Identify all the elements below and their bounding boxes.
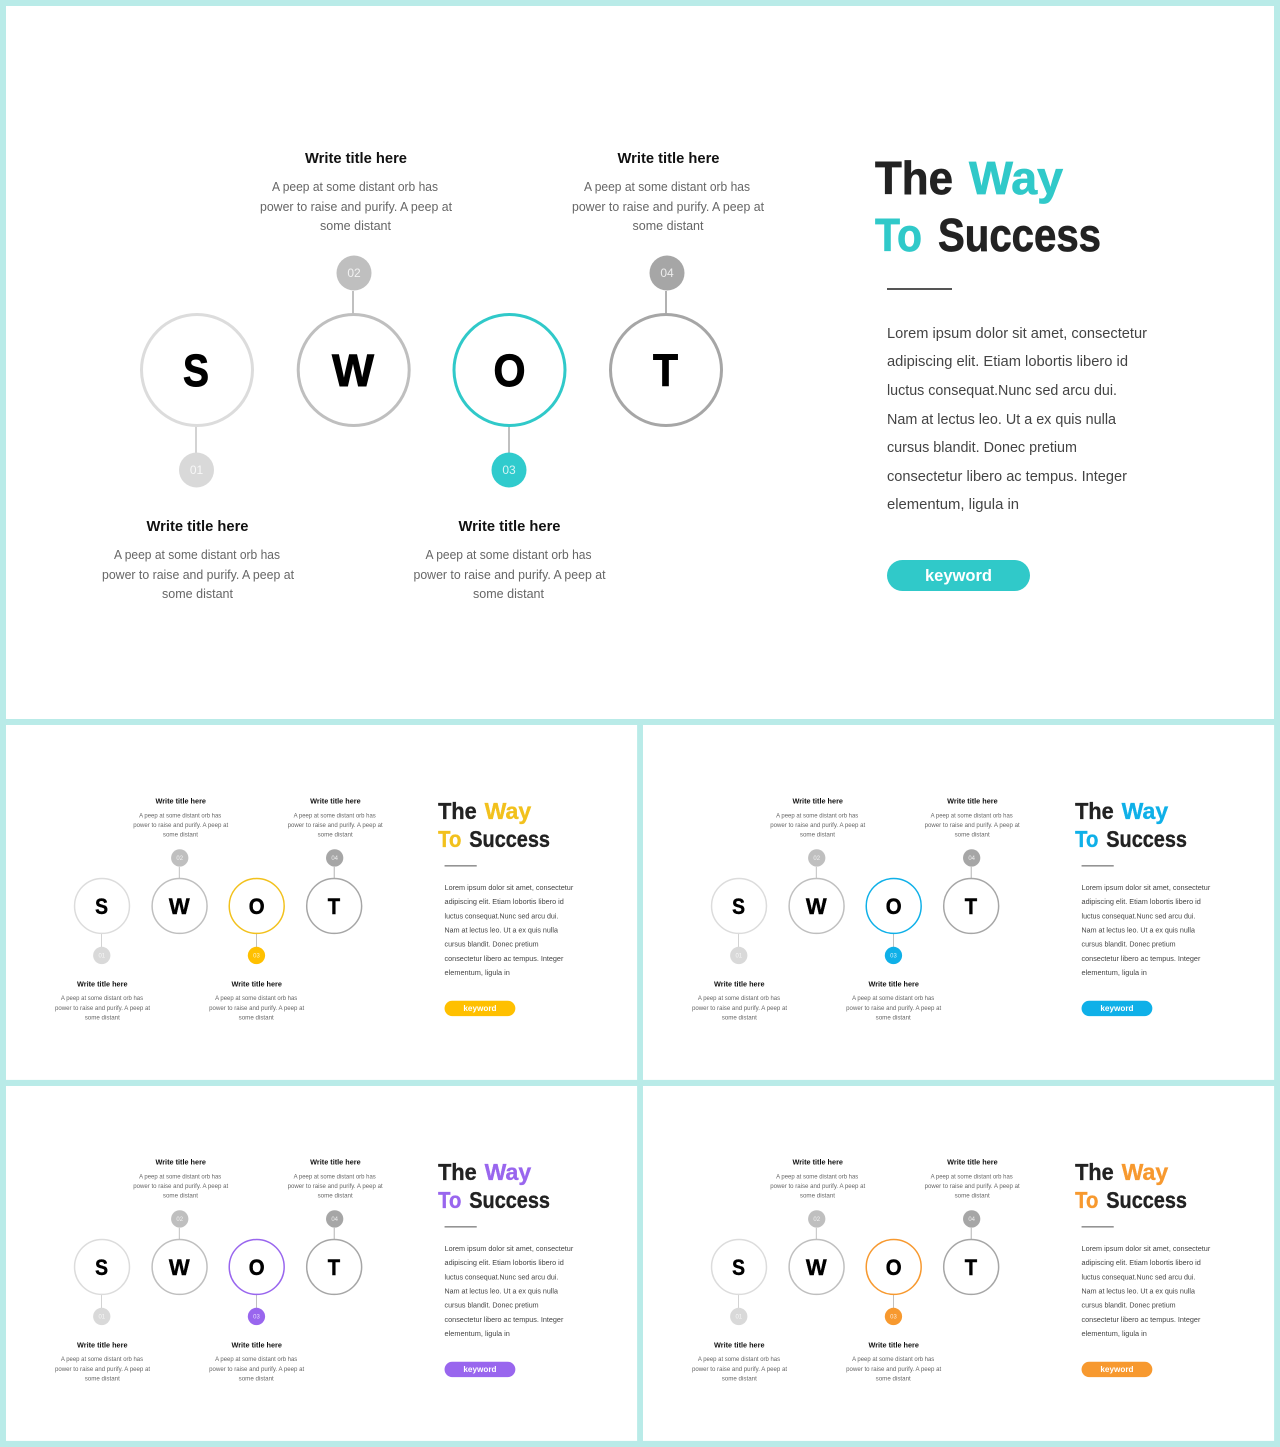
heading: Way — [485, 798, 532, 824]
text block: item 03: some distant — [239, 1015, 274, 1022]
text block: item 04: some distant — [955, 832, 990, 839]
T node with badge 04: T — [965, 1255, 977, 1280]
W node with badge 02: 02 — [176, 1217, 183, 1223]
text block: item 02: Write title here — [305, 150, 407, 167]
S node with badge 01 — [142, 314, 252, 488]
text block: item 04: A peep at some distant orb has — [931, 1173, 1013, 1180]
S node with badge 01: 01 — [735, 953, 743, 959]
text block: item 04 — [288, 1157, 383, 1200]
text block: item 01 — [55, 1340, 150, 1383]
text block: item 04: power to raise and purify. A peep at — [288, 822, 383, 829]
text block: item 04: some distant — [318, 832, 353, 839]
text block: item 03: power to raise and purify. A peep at — [209, 1005, 304, 1012]
T node with badge 04 — [307, 849, 362, 933]
panel: purple slide — [6, 1086, 637, 1441]
text block: item 02: power to raise and purify. A peep at — [133, 822, 228, 829]
body paragraph — [445, 1244, 574, 1338]
T node with badge 04: 04 — [331, 856, 339, 862]
O node with badge 03 — [866, 1239, 921, 1325]
body paragraph: adipiscing elit. Etiam lobortis libero id — [1082, 897, 1201, 906]
text block: item 03: A peep at some distant orb has — [852, 995, 934, 1002]
S node with badge 01 — [712, 1239, 766, 1325]
T node with badge 04: T — [653, 345, 678, 396]
O node with badge 03: 03 — [502, 463, 516, 477]
W node with badge 02: 02 — [813, 1217, 820, 1223]
text block: item 02: A peep at some distant orb has — [776, 1173, 858, 1180]
text block: item 01: Write title here — [714, 979, 765, 988]
body paragraph — [1082, 883, 1211, 977]
body paragraph: cursus blandit. Donec pretium — [1082, 940, 1176, 949]
heading: To — [438, 826, 461, 852]
S node with badge 01: S — [95, 1255, 108, 1280]
text block: item 02: A peep at some distant orb has — [139, 1173, 221, 1180]
body paragraph: luctus consequat.Nunc sed arcu dui. — [1082, 1272, 1195, 1281]
S node with badge 01: S — [183, 345, 209, 396]
text block: item 02: A peep at some distant orb has — [776, 812, 858, 819]
heading: Success — [469, 1187, 550, 1213]
S node with badge 01: 01 — [98, 953, 106, 959]
text block: item 04: Write title here — [310, 1157, 361, 1166]
heading: Way — [485, 1159, 532, 1185]
heading: Success — [469, 826, 550, 852]
body paragraph: luctus consequat.Nunc sed arcu dui. — [445, 911, 558, 920]
panel: large teal slide — [6, 6, 1274, 719]
text block: item 02: Write title here — [155, 1157, 206, 1166]
heading underline — [445, 1226, 477, 1228]
text block: item 04: Write title here — [947, 1157, 998, 1166]
text block: item 03: some distant — [239, 1376, 274, 1383]
body paragraph — [887, 325, 1147, 513]
text block: item 04: some distant — [632, 218, 704, 233]
text block: item 03: power to raise and purify. A peep at — [846, 1366, 941, 1373]
heading: Way — [1122, 1159, 1169, 1185]
text block: item 04 — [925, 796, 1020, 839]
text block: item 02: A peep at some distant orb has — [139, 812, 221, 819]
T node with badge 04: 04 — [968, 856, 976, 862]
text block: item 01: power to raise and purify. A peep at — [55, 1005, 150, 1012]
text block: item 01: Write title here — [146, 518, 248, 535]
S node with badge 01: S — [95, 894, 108, 919]
body paragraph: Lorem ipsum dolor sit amet, consectetur — [445, 1244, 574, 1253]
text block: item 04: Write title here — [947, 796, 998, 805]
heading: To — [438, 1187, 461, 1213]
text block: item 04: some distant — [955, 1193, 990, 1200]
W node with badge 02 — [152, 1210, 207, 1294]
heading — [438, 1159, 550, 1213]
text block: item 03: A peep at some distant orb has — [852, 1356, 934, 1363]
body paragraph: elementum, ligula in — [445, 968, 510, 977]
text block: item 04: power to raise and purify. A peep at — [572, 199, 764, 214]
S node with badge 01: 01 — [190, 463, 203, 477]
heading: To — [875, 209, 922, 261]
body paragraph: elementum, ligula in — [1082, 1329, 1147, 1338]
W node with badge 02 — [152, 849, 207, 933]
T node with badge 04: 04 — [968, 1217, 976, 1223]
text block: item 01: power to raise and purify. A peep at — [692, 1366, 787, 1373]
panel: orange slide — [643, 1086, 1274, 1441]
keyword button: keyword — [1100, 1003, 1134, 1013]
text block: item 01: A peep at some distant orb has — [698, 995, 780, 1002]
S node with badge 01: 01 — [735, 1314, 743, 1320]
text block: item 02: Write title here — [155, 796, 206, 805]
text block: item 03: Write title here — [868, 979, 919, 988]
body paragraph: cursus blandit. Donec pretium — [445, 940, 539, 949]
S node with badge 01: 01 — [98, 1314, 106, 1320]
body paragraph: cursus blandit. Donec pretium — [445, 1301, 539, 1310]
heading: The — [1075, 798, 1114, 824]
body paragraph: consectetur libero ac tempus. Integer — [1082, 1315, 1201, 1324]
text block: item 03: power to raise and purify. A peep at — [846, 1005, 941, 1012]
text block: item 01: some distant — [85, 1376, 120, 1383]
text block: item 02: some distant — [800, 1193, 835, 1200]
body paragraph — [445, 883, 574, 977]
keyword button — [445, 1001, 515, 1016]
keyword button: keyword — [463, 1364, 497, 1374]
S node with badge 01 — [75, 878, 129, 964]
text block: item 03 — [414, 518, 606, 601]
body paragraph: luctus consequat.Nunc sed arcu dui. — [1082, 911, 1195, 920]
T node with badge 04 — [944, 1210, 999, 1294]
body paragraph: luctus consequat.Nunc sed arcu dui. — [887, 382, 1117, 399]
text block: item 03: power to raise and purify. A peep at — [209, 1366, 304, 1373]
heading — [1075, 798, 1187, 852]
W node with badge 02: W — [806, 894, 827, 919]
text block: item 03: Write title here — [231, 1340, 282, 1349]
keyword button — [1082, 1362, 1152, 1377]
text block: item 01 — [102, 518, 294, 601]
body paragraph: adipiscing elit. Etiam lobortis libero id — [887, 353, 1128, 370]
S node with badge 01: S — [732, 1255, 745, 1280]
body paragraph: Nam at lectus leo. Ut a ex quis nulla — [445, 926, 559, 935]
text block: item 04: A peep at some distant orb has — [584, 179, 750, 194]
text block: item 01: Write title here — [77, 979, 128, 988]
heading — [1075, 1159, 1187, 1213]
W node with badge 02 — [298, 256, 409, 426]
text block: item 02: some distant — [163, 1193, 198, 1200]
O node with badge 03 — [229, 1239, 284, 1325]
text block: item 04: power to raise and purify. A peep at — [925, 1183, 1020, 1190]
body paragraph: Lorem ipsum dolor sit amet, consectetur — [1082, 1244, 1211, 1253]
heading: The — [438, 1159, 477, 1185]
O node with badge 03: 03 — [253, 953, 260, 959]
T node with badge 04 — [944, 849, 999, 933]
O node with badge 03: 03 — [890, 1314, 897, 1320]
text block: item 02: power to raise and purify. A peep at — [133, 1183, 228, 1190]
text block: item 01: A peep at some distant orb has — [114, 547, 280, 562]
W node with badge 02: 02 — [176, 856, 183, 862]
O node with badge 03: O — [249, 1255, 265, 1280]
text block: item 04 — [925, 1157, 1020, 1200]
text block: item 02: power to raise and purify. A peep at — [260, 199, 452, 214]
text block: item 03 — [846, 1340, 941, 1383]
O node with badge 03: 03 — [890, 953, 897, 959]
text block: item 01: some distant — [162, 586, 233, 601]
body paragraph: Nam at lectus leo. Ut a ex quis nulla — [1082, 926, 1196, 935]
body paragraph: cursus blandit. Donec pretium — [1082, 1301, 1176, 1310]
text block: item 03: some distant — [876, 1015, 911, 1022]
O node with badge 03: O — [494, 345, 526, 396]
heading underline — [1082, 865, 1114, 867]
body paragraph: Nam at lectus leo. Ut a ex quis nulla — [887, 411, 1117, 428]
body paragraph: Nam at lectus leo. Ut a ex quis nulla — [1082, 1287, 1196, 1296]
text block: item 03: some distant — [473, 586, 544, 601]
S node with badge 01: S — [732, 894, 745, 919]
text block: item 03: Write title here — [458, 518, 560, 535]
T node with badge 04: 04 — [331, 1217, 339, 1223]
text block: item 01: power to raise and purify. A peep at — [102, 567, 294, 582]
heading — [875, 152, 1101, 261]
text block: item 01 — [692, 1340, 787, 1383]
text block: item 01: Write title here — [77, 1340, 128, 1349]
text block: item 03: Write title here — [231, 979, 282, 988]
T node with badge 04: T — [328, 894, 340, 919]
W node with badge 02 — [789, 1210, 844, 1294]
heading: Success — [1106, 826, 1187, 852]
heading underline — [445, 865, 477, 867]
body paragraph: consectetur libero ac tempus. Integer — [887, 468, 1127, 485]
text block: item 03 — [846, 979, 941, 1022]
text block: item 03: power to raise and purify. A peep at — [414, 567, 606, 582]
text block: item 02 — [770, 796, 865, 839]
panel: yellow slide — [6, 725, 637, 1080]
text block: item 02: some distant — [320, 218, 391, 233]
text block: item 04 — [288, 796, 383, 839]
O node with badge 03 — [229, 878, 284, 964]
heading underline — [887, 288, 952, 290]
keyword button: keyword — [463, 1003, 497, 1013]
keyword button — [445, 1362, 515, 1377]
heading: Way — [1122, 798, 1169, 824]
text block: item 03: A peep at some distant orb has — [215, 1356, 297, 1363]
text block: item 04: some distant — [318, 1193, 353, 1200]
text block: item 03 — [209, 979, 304, 1022]
body paragraph: Lorem ipsum dolor sit amet, consectetur — [445, 883, 574, 892]
heading: Success — [938, 209, 1101, 261]
body paragraph: luctus consequat.Nunc sed arcu dui. — [445, 1272, 558, 1281]
body paragraph: elementum, ligula in — [887, 496, 1019, 513]
text block: item 03: A peep at some distant orb has — [215, 995, 297, 1002]
panel: blue slide — [643, 725, 1274, 1080]
O node with badge 03: O — [886, 894, 902, 919]
text block: item 01: Write title here — [714, 1340, 765, 1349]
text block: item 01: some distant — [722, 1376, 757, 1383]
W node with badge 02: W — [806, 1255, 827, 1280]
body paragraph: elementum, ligula in — [1082, 968, 1147, 977]
text block: item 02 — [770, 1157, 865, 1200]
heading: The — [438, 798, 477, 824]
text block: item 01: power to raise and purify. A peep at — [55, 1366, 150, 1373]
text block: item 02 — [133, 796, 228, 839]
text block: item 02 — [133, 1157, 228, 1200]
text block: item 04: power to raise and purify. A peep at — [288, 1183, 383, 1190]
text block: item 01 — [692, 979, 787, 1022]
body paragraph: elementum, ligula in — [445, 1329, 510, 1338]
text block: item 04: Write title here — [310, 796, 361, 805]
body paragraph: adipiscing elit. Etiam lobortis libero id — [445, 897, 564, 906]
W node with badge 02 — [789, 849, 844, 933]
keyword button — [1082, 1001, 1152, 1016]
text block: item 03: some distant — [876, 1376, 911, 1383]
O node with badge 03: O — [249, 894, 265, 919]
T node with badge 04: 04 — [660, 266, 674, 280]
body paragraph — [1082, 1244, 1211, 1338]
keyword button: keyword — [925, 566, 992, 585]
text block: item 01: A peep at some distant orb has — [61, 1356, 143, 1363]
heading: The — [875, 152, 953, 204]
text block: item 03: Write title here — [868, 1340, 919, 1349]
S node with badge 01 — [712, 878, 766, 964]
body paragraph: Lorem ipsum dolor sit amet, consectetur — [887, 325, 1147, 342]
text block: item 01 — [55, 979, 150, 1022]
O node with badge 03: 03 — [253, 1314, 260, 1320]
S node with badge 01 — [75, 1239, 129, 1325]
text block: item 02: power to raise and purify. A peep at — [770, 822, 865, 829]
O node with badge 03 — [454, 314, 565, 488]
text block: item 02: A peep at some distant orb has — [272, 179, 438, 194]
body paragraph: Lorem ipsum dolor sit amet, consectetur — [1082, 883, 1211, 892]
text block: item 02: Write title here — [792, 796, 843, 805]
text block: item 01: A peep at some distant orb has — [61, 995, 143, 1002]
body paragraph: consectetur libero ac tempus. Integer — [445, 954, 564, 963]
text block: item 04: A peep at some distant orb has — [294, 1173, 376, 1180]
body paragraph: adipiscing elit. Etiam lobortis libero id — [1082, 1258, 1201, 1267]
W node with badge 02: 02 — [347, 266, 361, 280]
text block: item 02: some distant — [800, 832, 835, 839]
heading: To — [1075, 826, 1098, 852]
text block: item 02: some distant — [163, 832, 198, 839]
text block: item 02 — [260, 150, 452, 233]
text block: item 04: power to raise and purify. A peep at — [925, 822, 1020, 829]
heading: The — [1075, 1159, 1114, 1185]
T node with badge 04: T — [328, 1255, 340, 1280]
body paragraph: cursus blandit. Donec pretium — [887, 439, 1077, 456]
text block: item 01: A peep at some distant orb has — [698, 1356, 780, 1363]
T node with badge 04 — [307, 1210, 362, 1294]
text block: item 03: A peep at some distant orb has — [426, 547, 592, 562]
keyword button: keyword — [1100, 1364, 1134, 1374]
W node with badge 02: W — [332, 345, 375, 396]
body paragraph: adipiscing elit. Etiam lobortis libero id — [445, 1258, 564, 1267]
T node with badge 04 — [610, 256, 722, 426]
heading: Success — [1106, 1187, 1187, 1213]
text block: item 01: power to raise and purify. A peep at — [692, 1005, 787, 1012]
body paragraph: consectetur libero ac tempus. Integer — [1082, 954, 1201, 963]
text block: item 03 — [209, 1340, 304, 1383]
text block: item 02: power to raise and purify. A peep at — [770, 1183, 865, 1190]
text block: item 04 — [572, 150, 764, 233]
text block: item 04: A peep at some distant orb has — [931, 812, 1013, 819]
heading underline — [1082, 1226, 1114, 1228]
text block: item 02: Write title here — [792, 1157, 843, 1166]
heading: Way — [969, 152, 1063, 204]
W node with badge 02: W — [169, 894, 190, 919]
text block: item 04: Write title here — [618, 150, 720, 167]
heading: To — [1075, 1187, 1098, 1213]
O node with badge 03 — [866, 878, 921, 964]
keyword button — [887, 560, 1030, 591]
body paragraph: consectetur libero ac tempus. Integer — [445, 1315, 564, 1324]
text block: item 04: A peep at some distant orb has — [294, 812, 376, 819]
O node with badge 03: O — [886, 1255, 902, 1280]
body paragraph: Nam at lectus leo. Ut a ex quis nulla — [445, 1287, 559, 1296]
W node with badge 02: W — [169, 1255, 190, 1280]
T node with badge 04: T — [965, 894, 977, 919]
text block: item 01: some distant — [722, 1015, 757, 1022]
text block: item 01: some distant — [85, 1015, 120, 1022]
heading — [438, 798, 550, 852]
W node with badge 02: 02 — [813, 856, 820, 862]
